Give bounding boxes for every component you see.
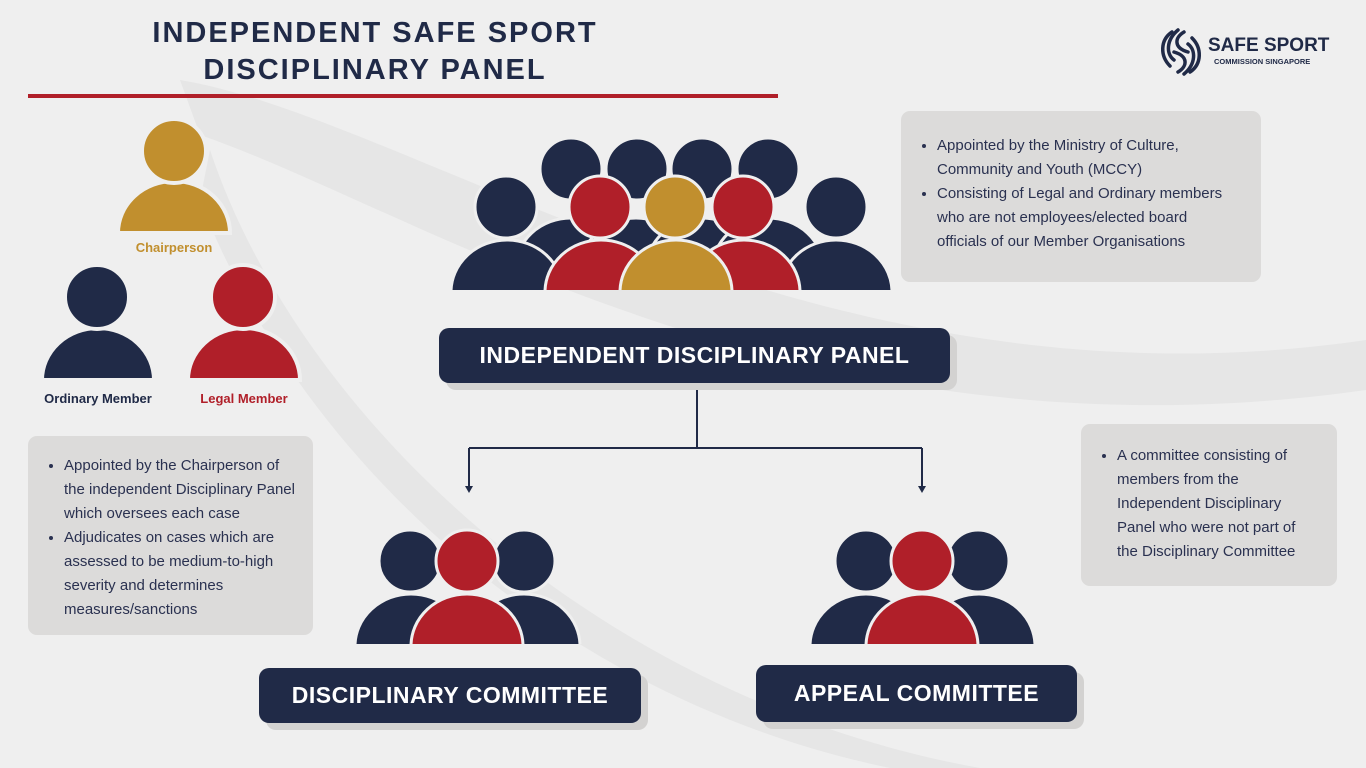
- icon: panel group: [451, 138, 892, 292]
- icon: legal member: [188, 265, 300, 380]
- text box: disciplinary committee description: [28, 436, 313, 635]
- button: independent disciplinary panel: INDEPENDENT DISCIPLINARY PANEL: [480, 342, 909, 368]
- title underline: [28, 94, 778, 98]
- logo: SAFE SPORT: [1208, 35, 1329, 56]
- icon: ordinary member: [42, 265, 154, 380]
- text box: panel description: [901, 111, 1261, 282]
- people illustrations: [44, 121, 1034, 644]
- text box: appeal committee description: A committee consisting of members from the Independent Disciplinary Panel who were not part of the Disciplinary Committee: [1117, 447, 1295, 560]
- button: independent disciplinary panel: [439, 328, 950, 383]
- icon: disciplinary committee group: [355, 530, 580, 646]
- text box: panel description: Appointed by the Ministry of Culture,: [937, 137, 1179, 154]
- button: appeal committee: [756, 665, 1077, 722]
- button: appeal committee: APPEAL COMMITTEE: [794, 680, 1039, 706]
- label: legal member: Legal Member: [200, 391, 288, 406]
- icon: chairperson: [118, 119, 230, 233]
- label: ordinary member: Ordinary Member: [44, 391, 152, 406]
- label: chairperson: Chairperson: [136, 240, 212, 255]
- text box: panel description: who are not employees/elected board: [937, 209, 1187, 226]
- title: [152, 17, 598, 86]
- button: disciplinary committee: [259, 668, 641, 723]
- text box: disciplinary committee description: Appointed by the Chairperson of the independent Disciplinary Panel which oversees each case: [64, 457, 295, 522]
- text box: panel description: officials of our Member Organisations: [937, 233, 1185, 250]
- icon: appeal committee group: [810, 530, 1035, 646]
- text box: panel description: Consisting of Legal and Ordinary members: [937, 185, 1222, 202]
- title: DISCIPLINARY PANEL: [203, 54, 547, 86]
- text box: appeal committee description: [1081, 424, 1337, 586]
- button: disciplinary committee: DISCIPLINARY COMMITTEE: [292, 682, 608, 708]
- text box: panel description: Community and Youth (MCCY): [937, 161, 1142, 178]
- text box: disciplinary committee description: Adjudicates on cases which are assessed to be medium-to-high severity and determines measures/sanctions: [64, 529, 274, 618]
- arrow: connector tree: [465, 384, 926, 493]
- logo: COMMISSION SINGAPORE: [1214, 57, 1310, 66]
- logo: [1161, 28, 1330, 76]
- title: INDEPENDENT SAFE SPORT: [152, 17, 598, 49]
